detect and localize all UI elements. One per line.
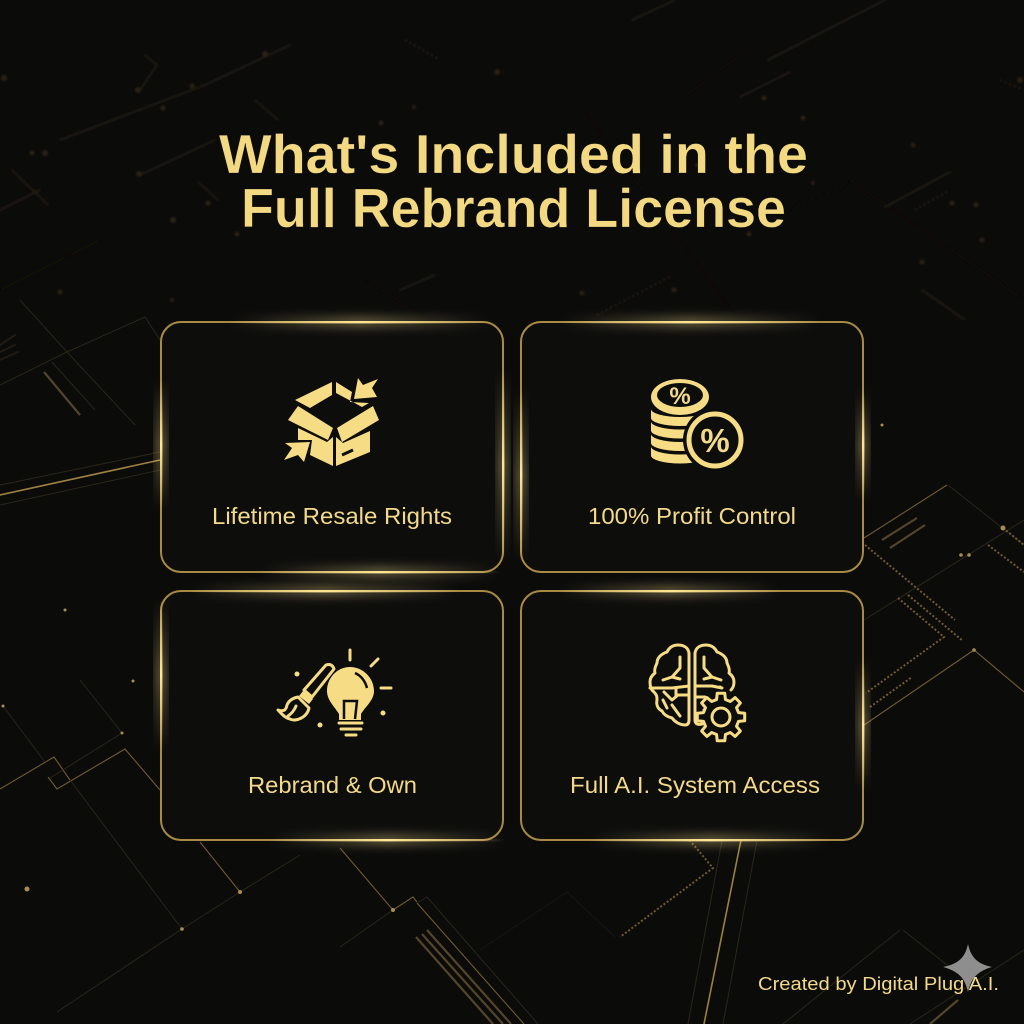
panel: profit control	[516, 317, 868, 572]
icon: percent coins	[651, 379, 747, 472]
label: profit control: 100% Profit Control	[588, 503, 796, 529]
icon: paintbrush and light bulb	[278, 650, 391, 735]
label: rebrand and own: Rebrand & Own	[248, 772, 417, 798]
icon: percent coins: %	[700, 422, 730, 459]
panel: full AI system access	[521, 586, 868, 845]
panel: rebrand and own	[156, 586, 505, 845]
icon: open box with arrows	[284, 378, 379, 466]
icon: grey sparkle	[943, 944, 992, 992]
panel: lifetime resale rights	[156, 317, 508, 577]
icon: percent coins: %	[669, 383, 691, 410]
footer credit: Created by Digital Plug A.I.	[758, 973, 999, 994]
label: lifetime resale rights: Lifetime Resale Rights	[212, 503, 452, 529]
icon: brain and gear	[650, 645, 745, 741]
title: What's Included in the	[219, 124, 808, 185]
label: full AI system access: Full A.I. System Access	[570, 772, 820, 798]
title: Full Rebrand License	[241, 178, 786, 239]
title	[219, 124, 808, 239]
